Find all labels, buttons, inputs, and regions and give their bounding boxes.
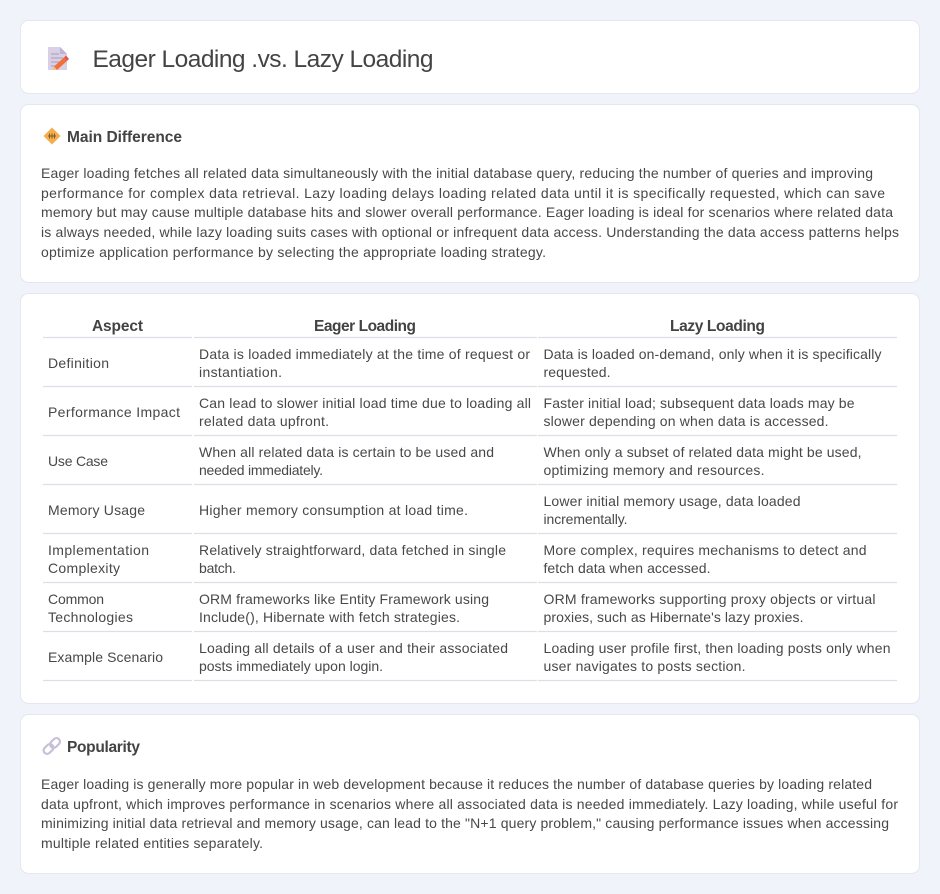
text block: main difference paragraph: memory but may cause multiple database hits and slower overall performance. Eager loading is ideal for scenarios where related data — [41, 204, 893, 220]
text block: main difference paragraph — [41, 165, 899, 260]
row: definition: requested. — [544, 364, 610, 380]
panel: header — [20, 20, 920, 94]
text block: main difference paragraph: Eager loading fetches all related data simultaneously with the initial database query, reducing the number of queries and improving — [41, 165, 873, 181]
row: implementation complexity: More complex, requires mechanisms to detect and — [544, 542, 866, 558]
row: example scenario — [48, 640, 890, 674]
row: definition — [48, 346, 882, 380]
row: use case — [48, 444, 862, 478]
panel: popularity — [20, 714, 920, 874]
icon: memo with pencil — [48, 47, 69, 70]
row: memory usage: Higher memory consumption at load time. — [199, 502, 468, 518]
row: common technologies: ORM frameworks like Entity Framework using — [199, 591, 489, 607]
panel: main difference — [20, 104, 920, 282]
row: definition: Data is loaded on-demand, only when it is specifically — [544, 346, 882, 362]
text block: popularity paragraph: minimizing initial data retrieval and memory usage, can lead to the "N+1 query problem," causing performance issues when accessing — [41, 815, 889, 831]
row: performance impact: slower depending on when data is accessed. — [544, 413, 828, 429]
heading: popularity: Popularity — [67, 739, 140, 756]
row: example scenario: posts immediately upon login. — [199, 658, 383, 674]
row: memory usage: incrementally. — [544, 511, 628, 527]
text block: popularity paragraph: multiple related entities separately. — [41, 835, 263, 851]
table header row — [92, 318, 765, 335]
icon: chain link — [42, 737, 61, 755]
row: performance impact: Faster initial load; subsequent data loads may be — [544, 395, 855, 411]
row: common technologies: Include(), Hibernate with fetch strategies. — [199, 609, 460, 625]
row: performance impact — [48, 395, 855, 429]
row: memory usage: Memory Usage — [48, 502, 145, 518]
table header row: Aspect — [92, 318, 143, 335]
row: definition: instantiation. — [199, 364, 282, 380]
table header row: Lazy Loading — [670, 318, 765, 335]
row: use case: When all related data is certain to be used and — [199, 444, 494, 460]
row: common technologies: Common — [48, 591, 104, 607]
table header row: Eager Loading — [314, 318, 416, 335]
row: implementation complexity: fetch data when accessed. — [544, 560, 710, 576]
row: use case: Use Case — [48, 453, 108, 469]
text block: main difference paragraph: is always needed, while lazy loading suits cases with optional or infrequent data access. Understanding the data access patterns helps — [41, 224, 899, 240]
text block: main difference paragraph: optimize application performance by selecting the appropriate loading strategy. — [41, 244, 546, 260]
title: Eager Loading .vs. Lazy Loading — [92, 46, 434, 73]
panel: comparison table — [20, 294, 920, 704]
row: common technologies: proxies, such as Hibernate's lazy proxies. — [544, 609, 804, 625]
row: performance impact: Performance Impact — [48, 404, 180, 420]
row: use case: needed immediately. — [199, 462, 323, 478]
row: implementation complexity: Implementation — [48, 542, 149, 558]
row: use case: optimizing memory and resources. — [544, 462, 764, 478]
text block: popularity paragraph: data upfront, which improves performance in scenarios where all associated data is needed immediately. Lazy loading, while useful for — [41, 796, 898, 812]
row: definition: Data is loaded immediately at the time of request or — [199, 346, 530, 362]
row: memory usage: Lower initial memory usage, data loaded — [544, 493, 800, 509]
icon: warning diamond — [44, 128, 60, 144]
row: example scenario: user navigates to posts section. — [544, 658, 746, 674]
row: common technologies — [48, 591, 876, 625]
row: implementation complexity: Complexity — [48, 560, 120, 576]
row: implementation complexity — [48, 542, 866, 576]
row: implementation complexity: Relatively straightforward, data fetched in single — [199, 542, 506, 558]
row: example scenario: Loading user profile first, then loading posts only when — [544, 640, 890, 656]
row: memory usage — [48, 493, 800, 527]
row: definition: Definition — [48, 355, 109, 371]
text block: popularity paragraph: Eager loading is generally more popular in web development because it reduces the number of database queries by loading related — [41, 776, 872, 792]
row: common technologies: ORM frameworks supporting proxy objects or virtual — [544, 591, 876, 607]
row: common technologies: Technologies — [48, 609, 133, 625]
row: example scenario: Loading all details of a user and their associated — [199, 640, 508, 656]
heading: main difference: Main Difference — [67, 129, 182, 146]
row: example scenario: Example Scenario — [48, 649, 163, 665]
row: performance impact: related data upfront. — [199, 413, 329, 429]
row: performance impact: Can lead to slower initial load time due to loading all — [199, 395, 531, 411]
text block: main difference paragraph: performance for complex data retrieval. Lazy loading delays loading related data until it is specifically requested, which can save — [41, 185, 885, 201]
row: use case: When only a subset of related data might be used, — [544, 444, 862, 460]
text block: popularity paragraph — [41, 776, 898, 851]
row: implementation complexity: batch. — [199, 560, 236, 576]
